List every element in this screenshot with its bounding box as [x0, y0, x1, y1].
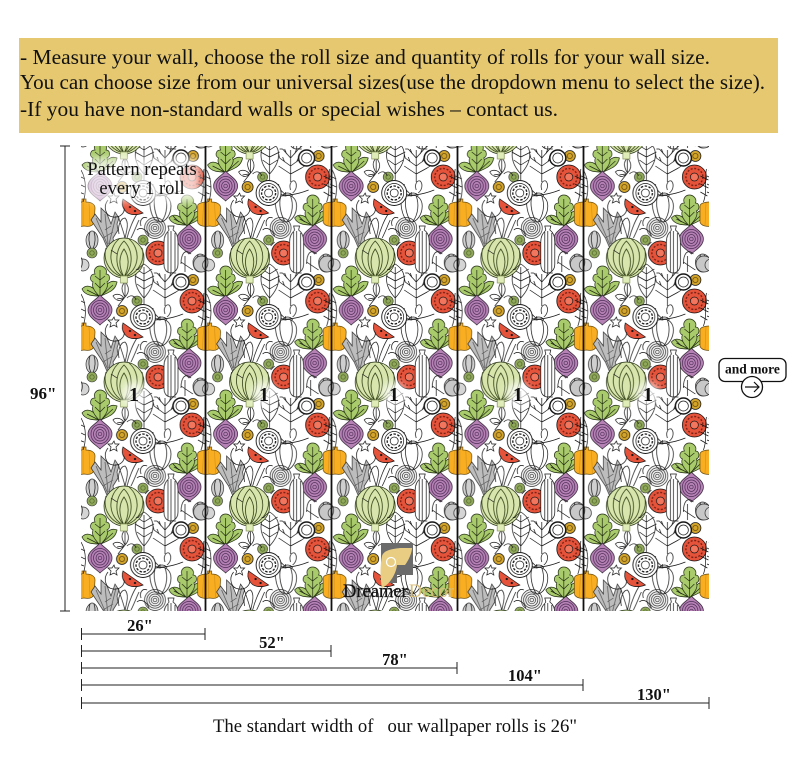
roll seams: [206, 146, 584, 611]
vegetable pattern: [81, 146, 709, 611]
roll numbers: 1: [643, 384, 653, 406]
banner line 2: You can choose size from our universal sizes(use the dropdown menu to select the size).: [20, 70, 765, 94]
roll numbers: 1: [259, 384, 269, 406]
and more button: and more: [725, 362, 780, 376]
note line 1: Pattern repeats: [87, 160, 197, 180]
52 inch bar: [82, 645, 331, 657]
130 inch bar: [82, 697, 709, 709]
height label: 96": [30, 384, 56, 403]
and more button: [719, 358, 786, 398]
roll numbers: [122, 382, 660, 406]
note line 2: every 1 roll: [99, 179, 185, 199]
logo icon: [380, 543, 413, 588]
roll numbers: 1: [513, 384, 523, 406]
logo: Dreamer Decor: [343, 543, 454, 602]
78 inch bar: [82, 662, 457, 674]
instruction banner: [19, 38, 778, 133]
wallpaper panel: five rolls of vegetable pattern: [81, 146, 709, 611]
104 inch bar: [82, 679, 583, 691]
roll numbers: 1: [129, 384, 139, 406]
logo wordmark: DreamerDecor: [343, 582, 454, 602]
width dimensions: [82, 628, 709, 709]
width labels: 104": [508, 666, 542, 685]
roll numbers: 1: [389, 384, 399, 406]
caption: The standart width of our wallpaper rolls is 26": [213, 716, 577, 737]
banner line 3: -If you have non-standard walls or special wishes – contact us.: [20, 97, 558, 121]
banner line 1: - Measure your wall, choose the roll size and quantity of rolls for your wall size.: [20, 45, 710, 69]
width labels: 26": [127, 616, 153, 635]
width labels: 78": [382, 650, 408, 669]
width labels: [127, 616, 671, 704]
width labels: 130": [637, 685, 671, 704]
height dimension: 96 inches: [30, 146, 70, 611]
arrow icon: [742, 376, 762, 398]
width labels: 52": [259, 633, 285, 652]
pattern repeat note: [86, 158, 200, 202]
26 inch bar: [82, 628, 205, 640]
